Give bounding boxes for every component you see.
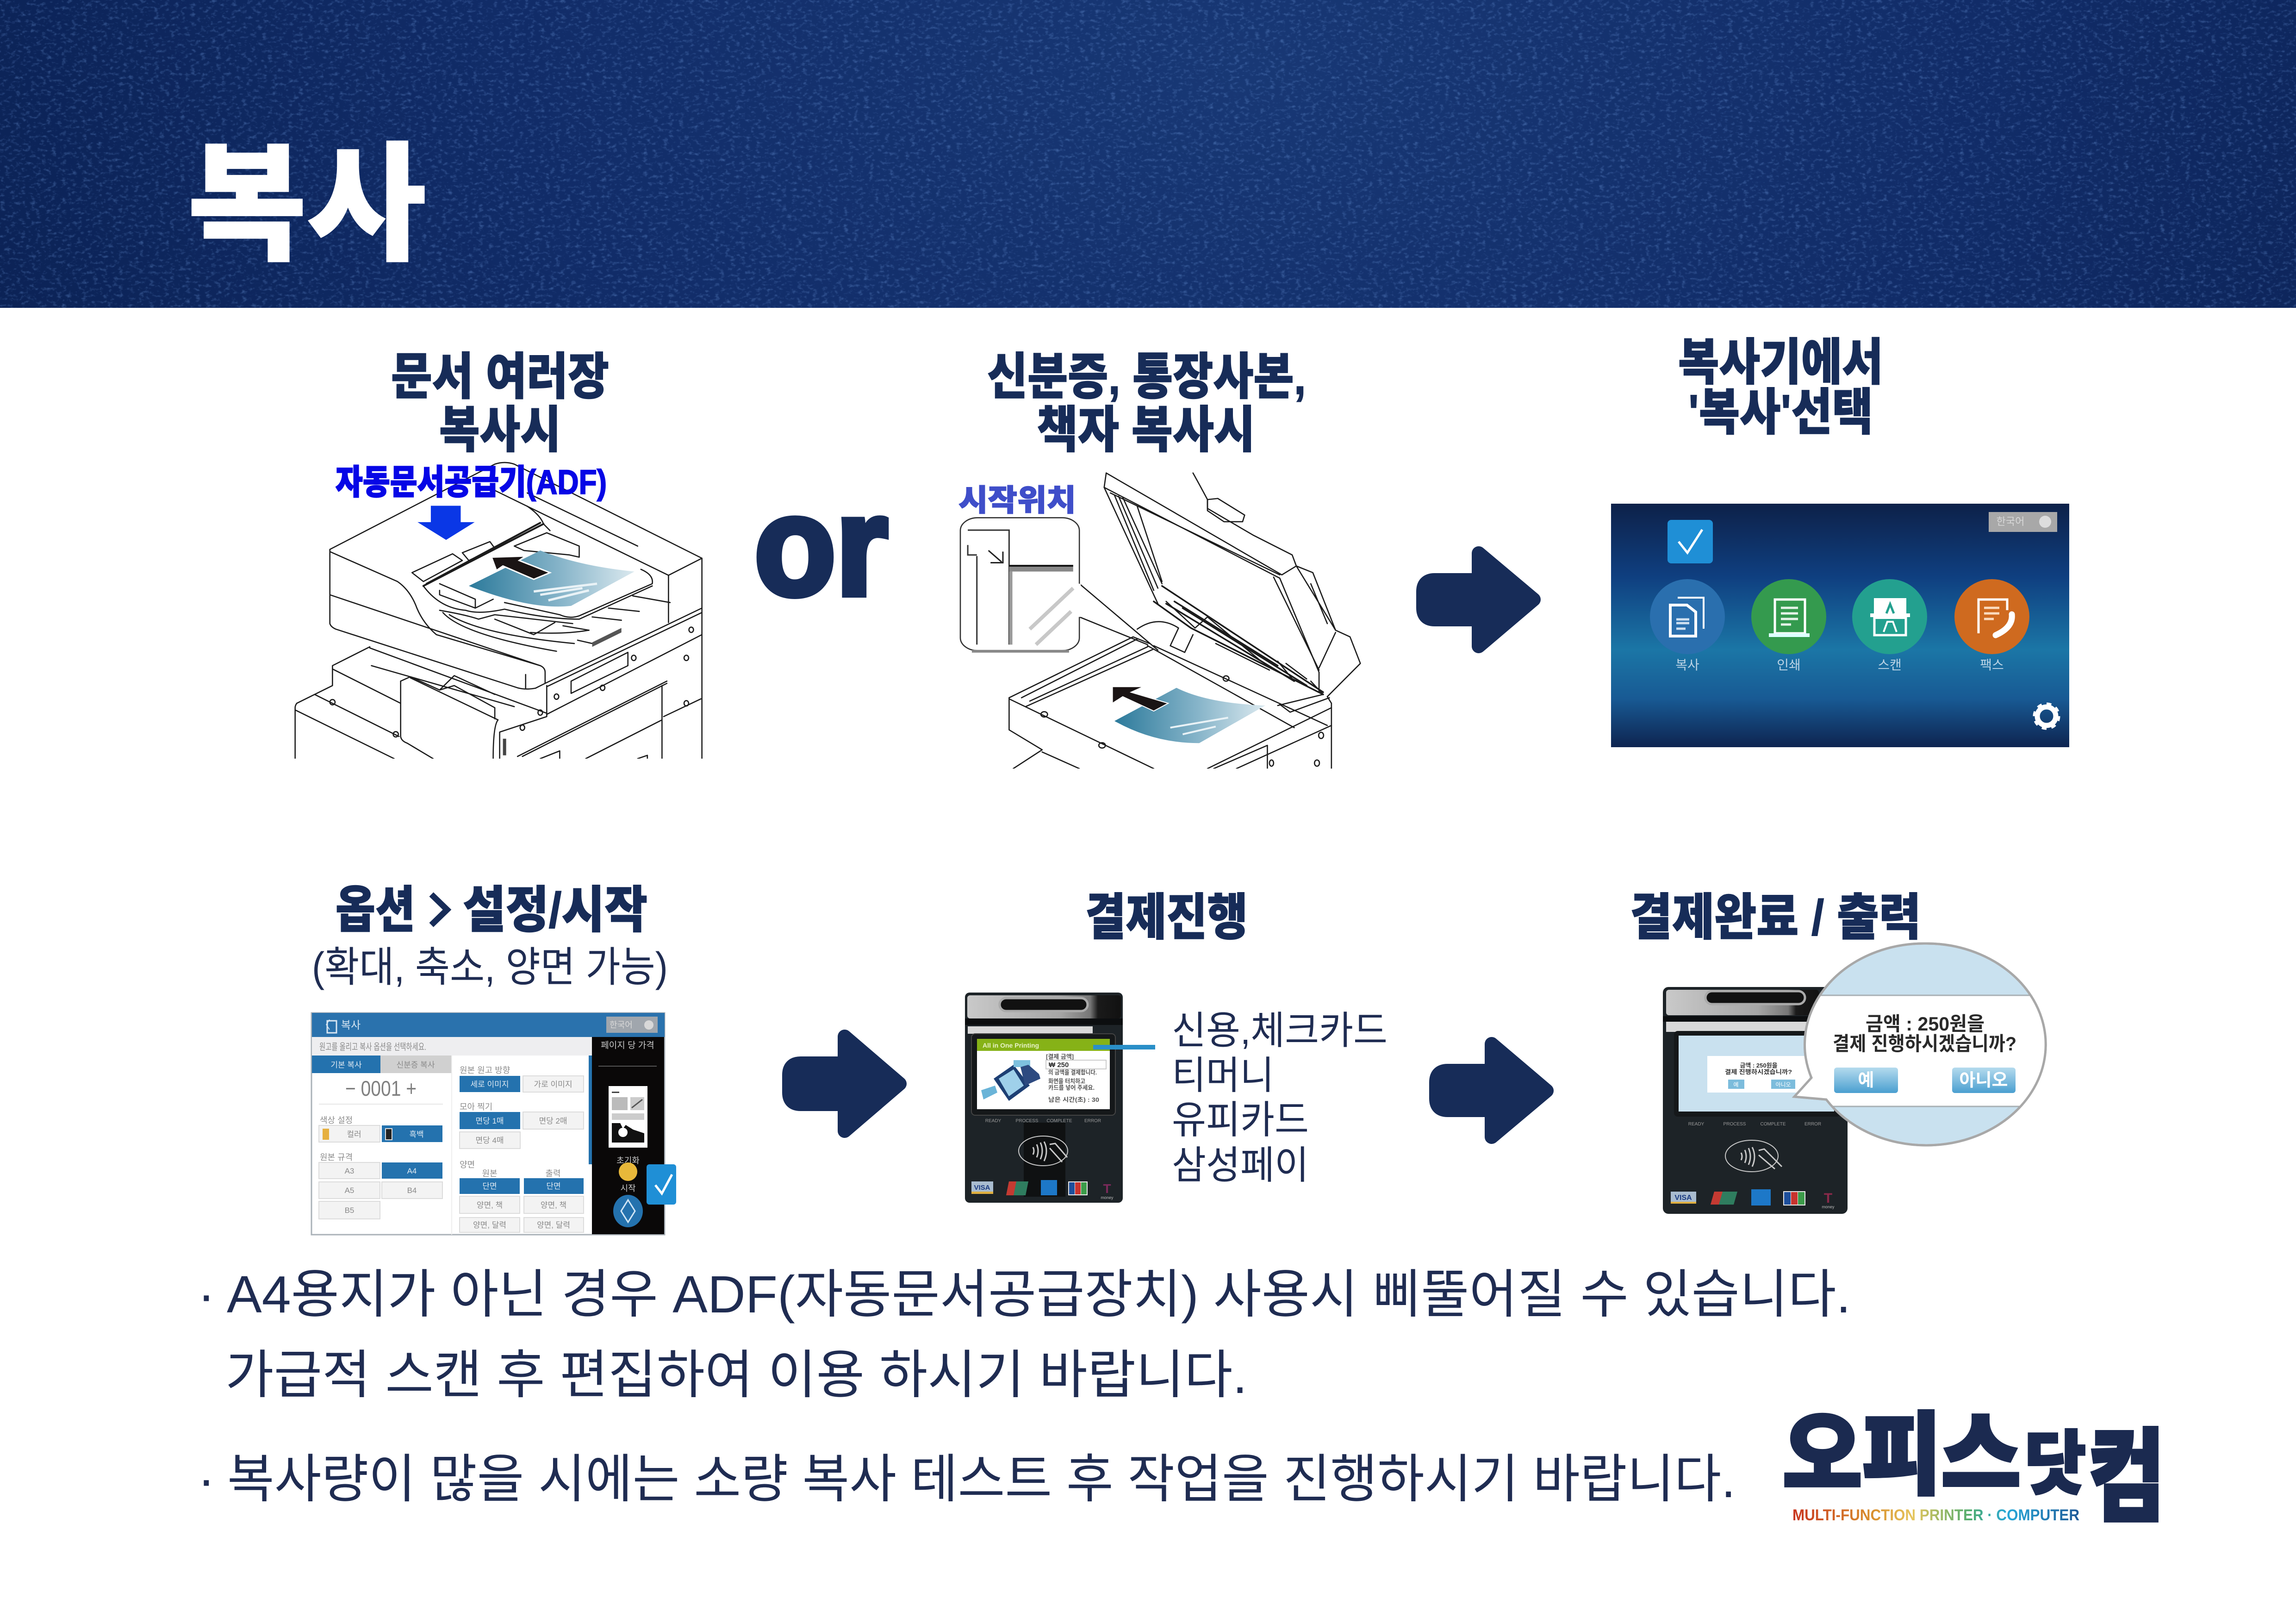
heading: options, settings, start: 옵션: [336, 882, 415, 938]
right options: 양면, 달력: [537, 1221, 570, 1230]
heading: select copy on copier: 복사기에서: [1678, 334, 1883, 390]
side panel: 페이지 당 가격: [601, 1040, 654, 1050]
terminal display: 예: [1733, 1081, 1739, 1088]
icon: fax: [1954, 579, 2029, 672]
icon: print: 인쇄: [1777, 658, 1801, 672]
terminal display: 금액 : 250원을: [1740, 1062, 1778, 1069]
card brand logos: [1671, 1189, 1835, 1209]
amount message: 금액 : 250원을: [1866, 1013, 1985, 1035]
no button: [1952, 1068, 2016, 1093]
icon: fax: 팩스: [1980, 658, 2004, 672]
left options: B4: [407, 1186, 417, 1195]
icon: settings gear: [2035, 704, 2059, 728]
title: 복사: [187, 133, 426, 277]
terminal display: [1679, 1036, 1834, 1112]
status labels: ERROR: [1804, 1122, 1821, 1127]
document sheet: [469, 550, 635, 606]
terminal display: [977, 1039, 1110, 1109]
terminal display: 카드를 넣어 주세요.: [1048, 1084, 1095, 1091]
icon: scan: 스캔: [1878, 658, 1902, 672]
note: test before bulk copying: 복사량이 많을 시에는 소량 복사 테스트 후 작업을 진행하시기 바랍니다.: [227, 1450, 1736, 1508]
icon: copy: [1650, 579, 1725, 672]
left options: 색상 설정: [320, 1116, 353, 1125]
right options: 면당 2매: [539, 1117, 567, 1125]
side panel: [592, 1037, 664, 1234]
terminal display: 아니오: [1775, 1081, 1791, 1088]
left options: 컬러: [347, 1130, 361, 1139]
heading: ID card, bankbook, book: 책자 복사시: [1037, 402, 1255, 458]
yes button: 예: [1858, 1071, 1874, 1090]
contactless symbol: [1725, 1140, 1782, 1172]
side panel: 초기화: [616, 1156, 640, 1165]
check mark: [647, 1164, 676, 1205]
right options: 양면, 책: [541, 1201, 566, 1210]
heading: ID card, bankbook, book: 신분증, 통장사본,: [987, 349, 1306, 405]
tabs: 기본 복사: [330, 1061, 362, 1069]
panel: home screen: [1611, 504, 2069, 747]
start position inset: [960, 518, 1079, 651]
panel: copy options screen: [311, 1013, 676, 1235]
note: ADF skew warning: 가급적 스캔 후 편집하여 이용 하시기 바랍니다.: [225, 1346, 1247, 1404]
status labels: READY: [985, 1118, 1002, 1124]
right options: 모아 찍기: [460, 1102, 492, 1112]
callout: payment confirmation bubble: [1786, 943, 2064, 1145]
terminal display: 화면을 터치하고: [1048, 1078, 1085, 1085]
payment method list: [1172, 1009, 1388, 1187]
terminal display: All in One Printing: [983, 1042, 1039, 1049]
language button: 한국어: [1997, 516, 2024, 527]
payment method list: 신용,체크카드: [1172, 1009, 1388, 1052]
title bar: [312, 1013, 665, 1037]
arrow 3: [1436, 1044, 1547, 1137]
status labels: [1688, 1122, 1821, 1127]
logo: 오피스: [1783, 1405, 2021, 1506]
card brand logos: VISA: [974, 1184, 990, 1192]
side panel: 시작: [620, 1184, 636, 1193]
left options: A3: [345, 1167, 354, 1175]
copy counter: − 0001 +: [345, 1076, 417, 1100]
contactless symbol: [1019, 1136, 1068, 1166]
heading: payment complete, output: 결제완료 / 출력: [1630, 889, 1921, 945]
icon: print: [1751, 579, 1826, 672]
tabs: 신분증 복사: [397, 1061, 435, 1069]
title bar: 복사: [341, 1019, 361, 1031]
document on glass: [1114, 688, 1265, 743]
no button: 아니오: [1960, 1071, 2008, 1090]
right options: 가로 이미지: [534, 1080, 572, 1089]
yes button: [1834, 1068, 1898, 1093]
card brand logos: T: [1824, 1191, 1832, 1206]
note: ADF skew warning: ·: [198, 1265, 215, 1324]
status labels: ERROR: [1084, 1118, 1101, 1124]
logo: [1783, 1405, 2165, 1534]
heading: select copy on copier: '복사'선택: [1688, 384, 1873, 440]
right options: 단면: [482, 1182, 497, 1191]
selection checkbox: [1668, 520, 1713, 563]
label: start position: 시작위치: [958, 483, 1076, 517]
instruction bar: [312, 1037, 592, 1056]
header banner: [0, 0, 2296, 308]
status labels: [985, 1118, 1101, 1124]
heading: multiple documents: [391, 349, 609, 458]
status labels: COMPLETE: [1760, 1122, 1786, 1127]
note: ADF skew warning: A4용지가 아닌 경우 ADF(자동문서공급장치) 사용시 삐뚤어질 수 있습니다.: [227, 1265, 1851, 1324]
right options: 면당 1매: [475, 1117, 504, 1125]
heading: payment in progress: 결제진행: [1085, 889, 1248, 945]
subheading: zoom and duplex: (확대, 축소, 양면 가능): [312, 944, 668, 991]
payment method list: 삼성페이: [1172, 1143, 1309, 1187]
arrow 2: [789, 1037, 900, 1131]
left options: A5: [345, 1186, 354, 1195]
title bar: 〈: [319, 1019, 330, 1031]
terminal display: [결제 금액]: [1046, 1053, 1074, 1060]
note: ADF skew warning: [198, 1265, 1851, 1404]
right options: 단면: [546, 1182, 561, 1191]
left options: 원본 규격: [320, 1153, 353, 1162]
status labels: COMPLETE: [1046, 1118, 1072, 1124]
right options: 양면, 책: [477, 1201, 503, 1210]
terminal display: 결제 진행하시겠습니까?: [1725, 1068, 1792, 1075]
left options: [319, 1116, 442, 1219]
right options: 양면: [460, 1160, 475, 1169]
right options: 출력: [545, 1169, 561, 1178]
left options: A4: [407, 1167, 417, 1175]
heading: options, settings, start: 설정/시작: [463, 882, 647, 938]
card brand logos: money: [1822, 1205, 1835, 1209]
heading: multiple documents: 문서 여러장: [391, 349, 609, 405]
payment method list: 유피카드: [1172, 1098, 1309, 1142]
right options: 면당 4매: [475, 1136, 504, 1145]
card brand logos: money: [1101, 1195, 1114, 1200]
card brand logos: [971, 1180, 1114, 1200]
panel: payment terminal: [965, 993, 1123, 1203]
or: or: [754, 468, 888, 625]
placement arrow: [1113, 687, 1168, 711]
document preview thumbnail: [609, 1086, 647, 1148]
right options: 원본: [482, 1169, 498, 1178]
terminal display: 의 금액을 결제합니다.: [1048, 1069, 1097, 1076]
left options: 흑백: [409, 1130, 424, 1139]
confirmation question: 결제 진행하시겠습니까?: [1833, 1033, 2016, 1055]
right options: 세로 이미지: [471, 1080, 509, 1089]
logo: 컴: [2088, 1422, 2165, 1534]
heading: options, settings, start: [336, 882, 647, 938]
right options: 원본 원고 방향: [460, 1066, 510, 1075]
left options: B5: [345, 1206, 354, 1215]
illustration: scanner with open lid: [960, 473, 1360, 768]
heading: ID card, bankbook, book: [987, 349, 1306, 458]
icon: scan: [1852, 579, 1927, 672]
logo: 닷: [2025, 1425, 2086, 1503]
connector line: [1093, 1045, 1155, 1049]
feed direction arrow: [492, 556, 550, 579]
right options: 양면, 달력: [473, 1221, 506, 1230]
terminal display: 남은 시간(초) : 30: [1048, 1096, 1099, 1103]
card brand logos: T: [1103, 1181, 1111, 1196]
payment method list: 티머니: [1172, 1054, 1274, 1097]
card brand logos: VISA: [1674, 1194, 1692, 1202]
title bar: 한국어: [610, 1020, 633, 1030]
icon: copy: 복사: [1675, 658, 1699, 672]
tabs: [312, 1056, 451, 1073]
status labels: READY: [1688, 1122, 1705, 1127]
heading: select copy on copier: [1678, 334, 1883, 440]
terminal display: ₩ 250: [1049, 1061, 1069, 1069]
language button: [1989, 512, 2057, 532]
status labels: PROCESS: [1724, 1122, 1746, 1127]
label: automatic document feeder: 자동문서공급기(ADF): [336, 463, 607, 501]
arrow 1: [1423, 553, 1534, 646]
heading: multiple documents: 복사시: [439, 402, 561, 458]
instruction bar: 원고를 올리고 복사 옵션을 선택하세요.: [319, 1042, 426, 1052]
panel: terminal with confirmation: [1663, 987, 1848, 1214]
right options: [451, 1056, 592, 1235]
blue down arrow: [417, 506, 475, 540]
note: test before bulk copying: ·: [198, 1450, 215, 1508]
illustration: printer with ADF: [295, 462, 702, 759]
logo tagline: MULTI-FUNCTION PRINTER · COMPUTER: [1792, 1506, 2079, 1524]
status labels: PROCESS: [1016, 1118, 1039, 1124]
